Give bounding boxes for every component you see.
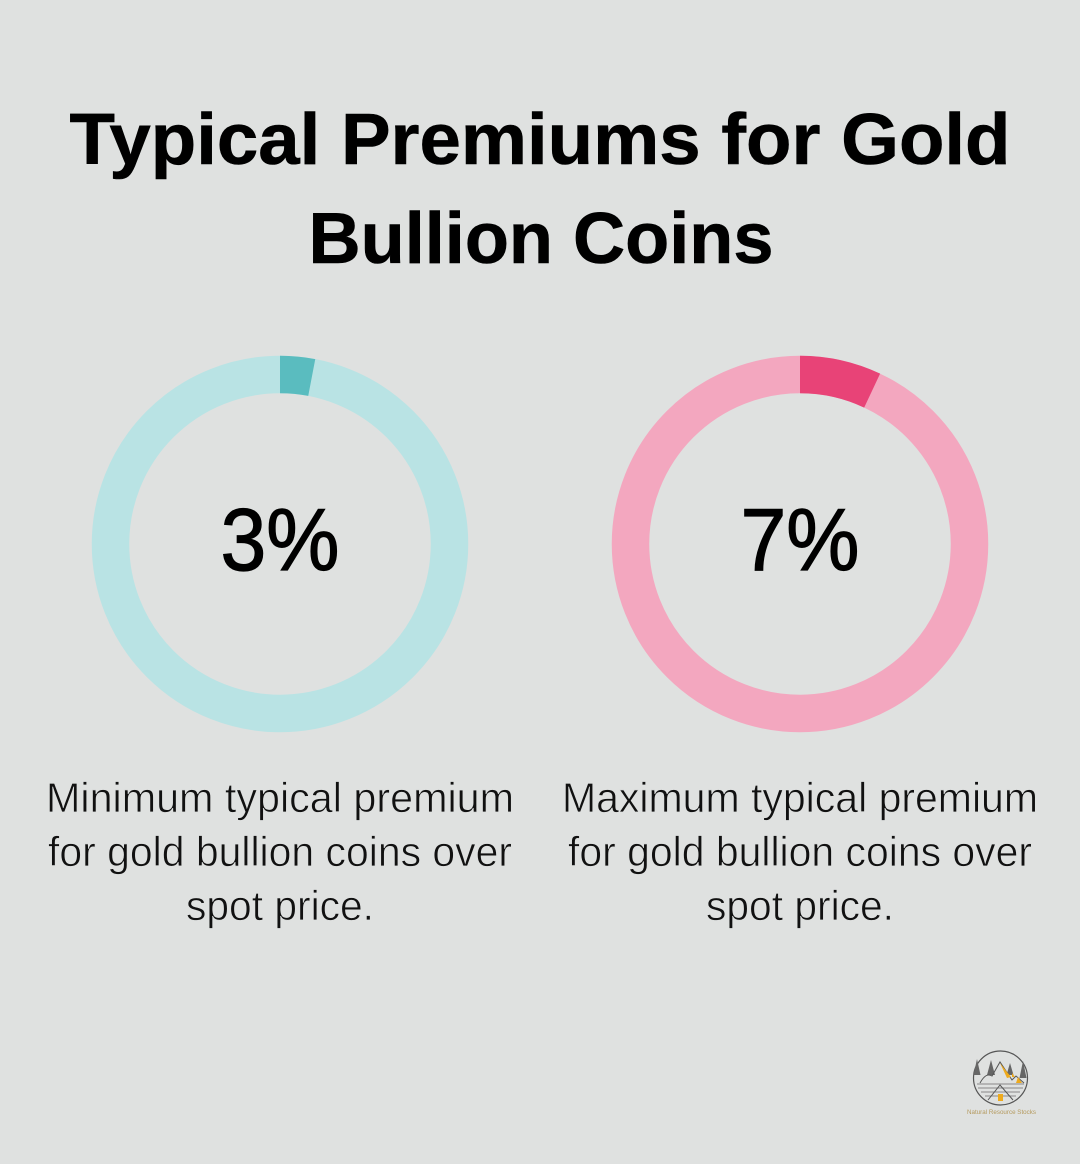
description: minimum (46, 774, 514, 929)
value: 3%: 3% (220, 490, 340, 589)
description: minimum: spot price. (186, 882, 374, 929)
description: maximum: spot price. (706, 882, 894, 929)
panel: minimum premium (46, 374, 514, 929)
title: Typical Premiums for Gold (70, 100, 1010, 180)
logo text: Natural Resource Stocks (967, 1109, 1037, 1116)
description: minimum: Minimum typical premium (46, 774, 514, 821)
description: minimum: for gold bullion coins over (48, 828, 512, 875)
value: 7%: 7% (740, 490, 860, 589)
donut chart: 7% (630, 374, 970, 714)
logo: Natural Resource Stocks (967, 1051, 1037, 1116)
description: maximum: for gold bullion coins over (568, 828, 1032, 875)
description: maximum: Maximum typical premium (562, 774, 1038, 821)
title: Bullion Coins (308, 199, 774, 279)
donut chart: 3% (110, 374, 450, 714)
title (70, 100, 1010, 279)
description: maximum (562, 774, 1038, 929)
icon: mountain emblem (974, 1051, 1028, 1105)
panel: maximum premium (562, 374, 1038, 929)
